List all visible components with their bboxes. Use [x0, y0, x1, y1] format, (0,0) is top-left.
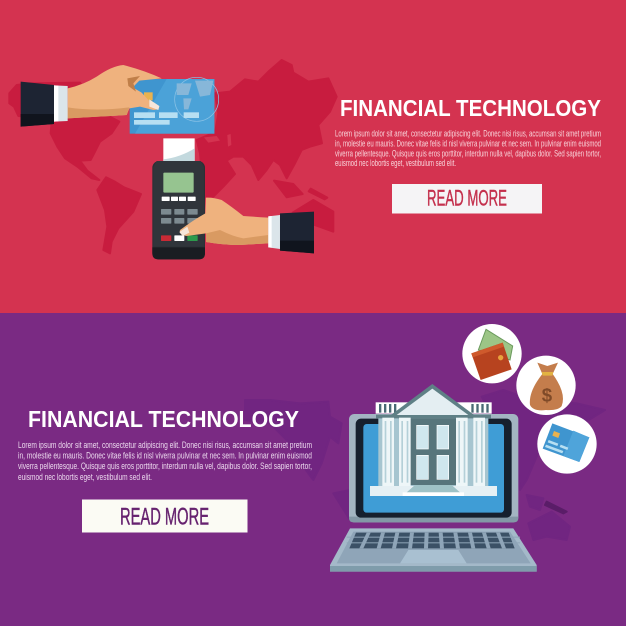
- icon: money bag: $: [542, 385, 553, 406]
- payment terminal: [152, 138, 205, 259]
- button: read more: READ MORE: [120, 504, 209, 530]
- text block: lorem ipsum: [335, 128, 601, 168]
- icon: credit card: [537, 414, 597, 474]
- icon: wallet with banknotes: [462, 324, 522, 383]
- world map: purple: [245, 390, 605, 540]
- text block: lorem ipsum: euismod nec lobortis eget, vestibulum sed elit.: [18, 472, 152, 482]
- button: read more: [392, 184, 542, 214]
- world map: red: [9, 60, 337, 253]
- bank building: [370, 384, 497, 496]
- heading: financial technology: FINANCIAL TECHNOLOGY: [340, 95, 601, 121]
- icon: money bag: [516, 356, 576, 415]
- button: read more: [82, 500, 248, 532]
- panel: red banner: [0, 0, 626, 313]
- illustration: card payment: [21, 65, 314, 259]
- right hand with sleeve: [179, 198, 314, 253]
- credit card: [130, 77, 219, 134]
- text block: lorem ipsum: viverra pellentesque. Quisque quis eros porttitor, interdum nulla vel, dapibus dolor. Sed sapien tortor,: [18, 461, 312, 471]
- text block: lorem ipsum: euismod nec lobortis eget, vestibulum sed elit.: [335, 158, 456, 168]
- text block: lorem ipsum: Lorem ipsum dolor sit amet, consectetur adipiscing elit. Donec nisi risus, accumsan sit amet pretium: [18, 440, 312, 450]
- illustration: laptop and bank: [330, 384, 537, 572]
- laptop: [330, 414, 537, 572]
- text block: lorem ipsum: [18, 440, 312, 482]
- text block: lorem ipsum: in, molestie eu mauris. Donec vitae felis id nisl viverra pulvinar et nec sem. In pulvinar enim euismod: [18, 450, 312, 460]
- left hand with sleeve: [21, 65, 162, 127]
- panel: purple banner: [0, 313, 626, 626]
- button: read more: READ MORE: [427, 186, 507, 210]
- heading: financial technology: FINANCIAL TECHNOLOGY: [28, 406, 299, 432]
